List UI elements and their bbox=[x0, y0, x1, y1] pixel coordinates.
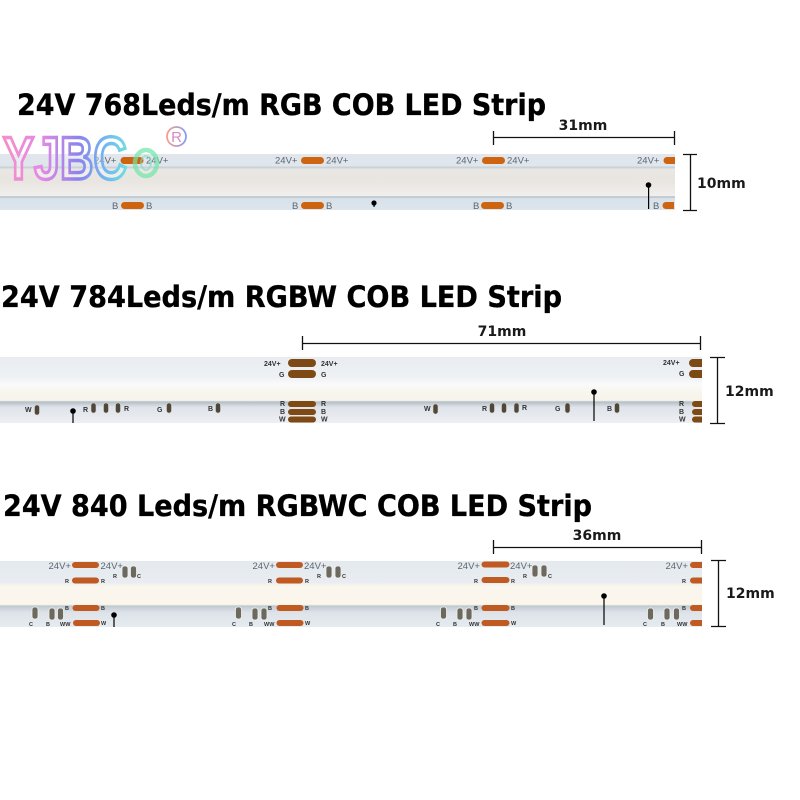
dimension: 31mm bbox=[494, 118, 674, 145]
channel labels: B bbox=[249, 622, 253, 628]
pad labels: B bbox=[326, 201, 332, 212]
title: RGBWC strip: 24V 840 Leds/m RGBWC COB LED Strip bbox=[3, 489, 592, 523]
pad labels: B bbox=[679, 409, 684, 416]
channel labels: W bbox=[101, 621, 107, 627]
pad labels: 24V+ bbox=[507, 156, 530, 166]
panel: RGBW strip bbox=[0, 357, 702, 424]
pad labels: 24V+ bbox=[326, 156, 349, 166]
channel labels: B bbox=[453, 622, 457, 628]
dimension: 36mm: 36mm bbox=[573, 528, 621, 544]
channel labels: R bbox=[305, 579, 309, 585]
channel labels: B bbox=[268, 606, 272, 612]
pad labels: R bbox=[280, 401, 285, 408]
pads: orange bbox=[72, 562, 702, 626]
channel labels: C bbox=[548, 574, 552, 580]
dimension: 36mm bbox=[494, 528, 702, 554]
pad labels: 24V+ bbox=[637, 156, 660, 166]
dimension: 12mm RGBWC: 12mm bbox=[726, 586, 775, 602]
registered mark: R bbox=[171, 129, 182, 146]
pad labels: 24V+ bbox=[275, 156, 298, 166]
channel labels: B bbox=[65, 606, 69, 612]
channel labels: B bbox=[305, 606, 309, 612]
pad labels: G bbox=[555, 406, 561, 413]
pad labels: W bbox=[424, 406, 431, 413]
pad labels: B bbox=[506, 201, 512, 212]
dimension: 12mm RGBW bbox=[710, 358, 774, 424]
channel labels: C bbox=[29, 622, 33, 628]
solder dots bbox=[111, 593, 607, 627]
pad labels: B bbox=[473, 201, 479, 212]
dimension: 71mm bbox=[302, 324, 700, 350]
pad labels: B bbox=[321, 409, 326, 416]
dimension: 10mm: 10mm bbox=[697, 176, 746, 192]
pad labels bbox=[25, 360, 686, 424]
pad labels: W bbox=[321, 416, 328, 424]
channel labels bbox=[29, 574, 688, 628]
pad labels: B bbox=[146, 201, 152, 212]
pad labels: 24V+ bbox=[146, 156, 169, 166]
voltage labels: 24V+ bbox=[304, 561, 327, 572]
channel labels: B bbox=[474, 606, 478, 612]
pad labels: B bbox=[607, 406, 612, 413]
channel labels: R bbox=[113, 574, 117, 580]
channel labels: C bbox=[232, 622, 236, 628]
channel labels: B bbox=[511, 606, 515, 612]
pads: bottom row bbox=[121, 202, 674, 209]
voltage labels: 24V+ bbox=[510, 561, 533, 572]
pad labels: 24V+ bbox=[663, 360, 680, 367]
voltage labels: 24V+ bbox=[252, 561, 275, 572]
dimension: 12mm RGBW: 12mm bbox=[725, 384, 774, 400]
voltage labels: 24V+ bbox=[666, 561, 688, 572]
pad labels: R bbox=[522, 405, 527, 412]
pad labels: R bbox=[482, 406, 487, 413]
panel: RGBWC strip bbox=[0, 561, 702, 628]
pad labels: B bbox=[112, 201, 118, 212]
panel: RGB strip bbox=[0, 154, 675, 212]
channel labels: R bbox=[511, 579, 515, 585]
voltage labels: 24V+ bbox=[100, 561, 123, 572]
dimension: 31mm: 31mm bbox=[559, 118, 607, 134]
pads: top row bbox=[120, 157, 675, 164]
pad labels: W bbox=[25, 407, 32, 414]
channel labels: R bbox=[317, 574, 321, 580]
channel labels: R bbox=[523, 574, 527, 580]
channel labels: R bbox=[474, 579, 478, 585]
voltage labels: 24V+ bbox=[458, 561, 480, 572]
pad labels: G bbox=[679, 371, 685, 378]
pad labels: 24V+ bbox=[94, 156, 117, 166]
pad labels: 24V+ bbox=[264, 361, 281, 368]
pad labels: G bbox=[157, 407, 163, 414]
title: RGBW strip: 24V 784Leds/m RGBW COB LED Strip bbox=[1, 280, 562, 314]
pad labels: R bbox=[124, 406, 129, 413]
channel labels: W bbox=[511, 621, 517, 627]
channel labels: WW bbox=[264, 622, 275, 628]
pad labels: R bbox=[679, 401, 684, 408]
pad labels: G bbox=[279, 372, 285, 379]
pad labels bbox=[94, 156, 660, 212]
voltage labels: 24V+ bbox=[48, 561, 71, 572]
channel labels: B bbox=[101, 606, 105, 612]
logo: YJBCo: YJBC bbox=[3, 125, 127, 192]
registered mark bbox=[167, 127, 186, 146]
small component pads bbox=[34, 403, 620, 415]
pad labels: 24V+ bbox=[456, 156, 479, 166]
dimension: 71mm: 71mm bbox=[478, 324, 526, 340]
channel labels: C bbox=[643, 622, 647, 628]
voltage labels bbox=[48, 561, 688, 572]
pad labels: B bbox=[280, 409, 285, 416]
channel labels: R bbox=[65, 579, 69, 585]
dimension: 12mm RGBWC bbox=[711, 560, 775, 626]
channel labels: R bbox=[682, 579, 686, 585]
channel labels: C bbox=[342, 574, 346, 580]
pad labels: W bbox=[679, 416, 686, 424]
channel labels: WW bbox=[677, 622, 688, 628]
small component pads bbox=[32, 565, 680, 620]
pad labels: B bbox=[292, 201, 298, 212]
channel labels: WW bbox=[60, 622, 71, 628]
channel labels: B bbox=[661, 622, 665, 628]
solder dots bbox=[371, 182, 651, 209]
channel labels: B bbox=[682, 606, 686, 612]
pad labels: G bbox=[321, 372, 327, 379]
pad labels: R bbox=[321, 401, 326, 408]
pad labels: B bbox=[653, 201, 659, 212]
pads: wide brown bbox=[288, 359, 702, 422]
channel labels: WW bbox=[469, 622, 480, 628]
channel labels: W bbox=[305, 621, 311, 627]
dimension: 10mm bbox=[683, 154, 746, 210]
pad labels: B bbox=[208, 406, 213, 413]
channel labels: R bbox=[101, 579, 105, 585]
pad labels: W bbox=[279, 416, 286, 424]
channel labels: R bbox=[268, 579, 272, 585]
pad labels: 24V+ bbox=[321, 361, 338, 368]
channel labels: C bbox=[137, 574, 141, 580]
solder dots bbox=[70, 389, 597, 423]
title: RGB strip: 24V 768Leds/m RGB COB LED Strip bbox=[17, 88, 546, 122]
pad labels: R bbox=[83, 407, 88, 414]
channel labels: B bbox=[46, 622, 50, 628]
channel labels: C bbox=[436, 622, 440, 628]
